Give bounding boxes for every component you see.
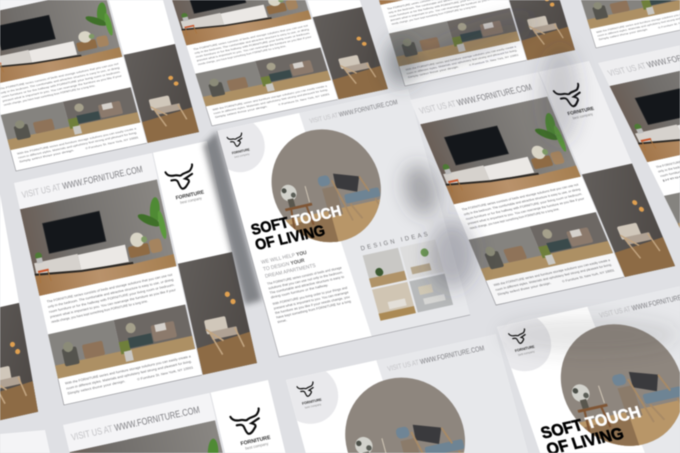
second photo: armchairs <box>469 212 613 281</box>
intro text block: The FORNITURE series consists of beds and storage solutions that you can use not <box>46 272 173 304</box>
white column <box>286 358 453 453</box>
white column <box>497 304 680 453</box>
text block <box>647 134 680 196</box>
intro text block: room furniture or for the hallway with FORNITURE your living room or bedroom. <box>465 192 583 221</box>
design ideas photo grid <box>363 240 453 321</box>
logo panel <box>211 380 296 453</box>
shadow behind centre flyer <box>203 131 262 305</box>
flyer: left, full page <box>14 141 257 405</box>
intro text block: present what is important to you. You can rearrange the furniture as you like if your <box>50 288 176 319</box>
flyer: top centre, partly cropped: room furniture or for the hallway with FORNITURE your living room or bedroom. <box>195 31 311 59</box>
logo circle <box>218 123 265 172</box>
header strip <box>63 393 216 452</box>
side photo: armchair and lamps <box>178 252 257 375</box>
flyer: top centre, partly cropped: © Forniture St. New York, NY 10001 <box>278 92 331 106</box>
intro text block: only in the bedroom. The comfortable and attractive structure is easy to use, or dining <box>463 187 581 216</box>
footer text block: © Forniture St. New York, NY 10001 <box>561 268 615 283</box>
flyer: top centre-right, partly cropped: room in different styles. Materials and upholstery feel strong and pleasant for living. <box>406 48 518 75</box>
flyer: far left, partly cropped <box>0 194 38 424</box>
body copy: The FORNITURE series consists of beds and storage <box>267 266 342 286</box>
body copy: the furniture as you like if your needs change, you <box>275 295 350 315</box>
flyer: top left, partly cropped: needs change, you have kept something from FORNITURE for a long time. <box>3 84 96 107</box>
flyer: top left, partly cropped: only in the bedroom. The comfortable and attractive structure is easy to use, or dining <box>0 66 120 95</box>
flyer: bottom left, cropped <box>63 380 296 453</box>
body copy: The comfortable and attractive structure is easy to <box>269 275 345 295</box>
bottom edge line <box>217 89 470 357</box>
white panel: bottom left corner <box>0 430 50 453</box>
second photo: armchairs <box>48 305 195 379</box>
logo panel: best company <box>180 196 202 205</box>
side photo: armchair and lamps <box>582 164 675 277</box>
header strip: VISIT US AT WWW.FORNITURE.COM <box>417 82 533 116</box>
main photo <box>70 420 237 453</box>
flyer: top centre, partly cropped: needs change, you have kept something from FORNITURE for a long time. <box>197 44 287 66</box>
logo panel: FORNITURE <box>175 189 205 202</box>
intro text block <box>39 266 186 334</box>
footer text block: room in different styles. Materials and upholstery feel strong and pleasant for living. <box>495 263 613 292</box>
flyer: top centre-right, partly cropped: needs change, you have kept something from FORNITURE for a long time. <box>391 4 477 26</box>
flyer: top centre, partly cropped: only in the bedroom. The comfortable and attractive structure is easy to use, or dining <box>194 27 310 55</box>
body copy: dining room furniture or the hallway. <box>270 283 329 299</box>
main photo: living room with TV <box>20 179 176 296</box>
body copy: have kept something from FORNITURE for a long <box>276 299 352 320</box>
logo circle: FORNITURE <box>231 147 251 155</box>
title: SOFT TOUCH <box>539 403 643 443</box>
intro text block: needs change, you have kept something from FORNITURE for a long time. <box>51 299 148 324</box>
flyer: top centre-right, partly cropped: © Forniture St. New York, NY 10001 <box>469 53 520 67</box>
flyer: top left, partly cropped: room furniture or for the hallway with FORNITURE your living room or bedroom. <box>1 70 121 99</box>
footer text block <box>486 253 624 305</box>
flyer: centre right, full page <box>410 61 675 305</box>
header strip: VISIT US AT WWW.FORNITURE.COM <box>21 164 144 200</box>
footer text block: room in different styles. Materials and upholstery feel strong and pleasant for living. <box>66 359 192 391</box>
logo panel: FORNITURE <box>567 106 596 117</box>
flyer: top left, partly cropped: room in different styles. Materials and upholstery feel strong and pleasant for living. <box>18 131 138 160</box>
logo panel <box>153 141 232 264</box>
intro text block <box>454 176 597 240</box>
flyer: top centre, partly cropped: Simply select those your design. <box>214 104 269 119</box>
logo panel <box>539 61 632 174</box>
intro text block: The FORNITURE series consists of beds and storage solutions that you can use not <box>461 182 579 212</box>
flyer: top centre, partly cropped: present what is important to you. You can rearrange the furniture as you like if your <box>196 35 312 62</box>
footer text block <box>58 349 202 405</box>
circular photo <box>320 354 495 453</box>
subheading: DREAM APARTMENTS <box>264 263 317 280</box>
footer text block: With the FORNITURE series and furniture storage solutions you can easily create a <box>65 354 191 386</box>
logo circle: FORNITURE <box>302 397 323 406</box>
body copy: present what is important to you. You can rearrange <box>273 290 349 311</box>
flyer: top centre-right, partly cropped <box>355 0 575 86</box>
flyer: top left, partly cropped: The FORNITURE series consists of beds and storage solutions that you can use not <box>0 62 119 91</box>
intro text block: needs change, you have kept something from FORNITURE for a long time. <box>469 207 560 230</box>
title: SOFT TOUCH <box>249 203 343 239</box>
header strip <box>14 153 158 209</box>
logo circle <box>286 372 338 424</box>
body copy: solutions that you can use not only in the bedroom. <box>268 270 344 290</box>
intro text block: present what is important to you. You can rearrange the furniture as you like if your <box>467 196 585 226</box>
flyer: top centre, partly cropped: The FORNITURE series consists of beds and storage solutions that you can use not <box>193 24 309 51</box>
logo circle: FORNITURE <box>514 345 536 353</box>
header strip <box>598 34 680 86</box>
logo circle: best company <box>234 153 251 159</box>
body copy <box>267 266 353 324</box>
flyer: top left, partly cropped <box>0 0 199 171</box>
flyer: top far right, partly cropped: Simply select those your design. <box>598 28 649 41</box>
footer text block: Simply select those your design. <box>497 281 552 296</box>
flyer: top centre, partly cropped: With the FORNITURE series and furniture storage solutions you can easily create a <box>212 84 328 112</box>
flyer: bottom centre, Soft Touch of Living cropped <box>286 335 526 453</box>
header url: VISIT US AT WWW.FORNITURE.COM <box>387 344 485 373</box>
flyer: top left, partly cropped: © Forniture St. New York, NY 10001 <box>85 135 139 150</box>
second photo <box>664 168 680 235</box>
flyer: top left, partly cropped: Simply select those your design. <box>19 148 75 164</box>
header strip <box>410 72 548 124</box>
logo circle <box>497 318 552 372</box>
flyer: top left, partly cropped: present what is important to you. You can rearrange the furniture as you like if your <box>2 74 122 103</box>
logo panel: best company <box>245 442 269 451</box>
design ideas heading: DESIGN IDEAS <box>360 232 429 252</box>
flyer: centre, Soft Touch of Living <box>205 79 470 359</box>
circular photo <box>248 107 408 265</box>
footer text block: © Forniture St. New York, NY 10001 <box>137 365 194 382</box>
white column <box>217 111 372 357</box>
flyer: far right, partly cropped <box>598 34 680 235</box>
flyer: top far right, partly cropped <box>546 0 680 48</box>
title: OF LIVING <box>254 223 327 254</box>
logo panel: best company <box>572 112 594 120</box>
flyer: top centre, partly cropped: room in different styles. Materials and upholstery feel strong and pleasant for living. <box>213 88 329 115</box>
flyer: top centre-right, partly cropped: Simply select those your design. <box>407 65 460 79</box>
logo circle: best company <box>517 349 536 357</box>
flyer: top centre, partly cropped <box>160 0 388 126</box>
main photo: living room with TV <box>420 97 581 204</box>
subheading: WE WILL HELP YOU <box>261 250 308 266</box>
main photo <box>609 58 680 162</box>
title <box>249 203 348 254</box>
subheading: TO DESIGN YOUR <box>262 258 306 273</box>
body copy: With FORNITURE you bring order to your things and <box>272 286 348 306</box>
header strip: VISIT US AT WWW.FORNITURE.COM <box>70 405 201 444</box>
flyer: top left, partly cropped: With the FORNITURE series and furniture storage solutions you can easily create a <box>17 126 137 156</box>
flyer: bottom right, Soft Touch of Living cropped <box>498 288 680 453</box>
plant shadow overlay <box>386 6 680 353</box>
logo panel: FORNITURE <box>240 435 272 447</box>
logo circle: best company <box>304 402 322 410</box>
footer text block: Simply select those your design. <box>67 379 126 396</box>
intro text block: only in the bedroom. The comfortable and attractive structure is easy to use, or dining <box>47 278 174 309</box>
flyer: top centre-right, partly cropped: With the FORNITURE series and furniture storage solutions you can easily create a <box>405 44 517 72</box>
subheading <box>261 249 317 280</box>
intro text block: room furniture or for the hallway with FORNITURE your living room or bedroom. <box>49 283 175 314</box>
header url: VISIT US AT WWW.FORNITURE.COM <box>309 99 398 125</box>
footer text block: With the FORNITURE series and furniture storage solutions you can easily create a <box>493 258 611 287</box>
body copy: time. <box>277 318 288 324</box>
circular photo <box>532 300 680 453</box>
